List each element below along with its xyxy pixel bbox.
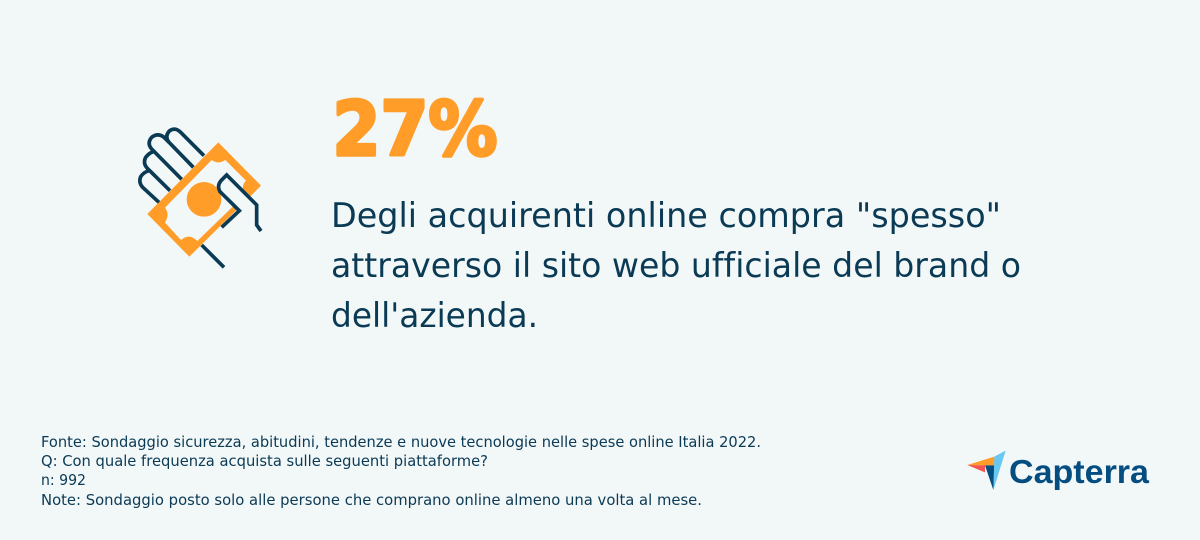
description text: Degli acquirenti online compra "spesso" <box>331 196 1001 236</box>
icon: hand holding banknote <box>140 129 261 267</box>
source notes: Note: Sondaggio posto solo alle persone che comprano online almeno una volta al mese. <box>41 491 702 509</box>
source notes: Q: Con quale frequenza acquista sulle seguenti piattaforme? <box>41 452 488 470</box>
logo wordmark: Capterra <box>1009 453 1150 490</box>
source notes: Fonte: Sondaggio sicurezza, abitudini, tendenze e nuove tecnologie nelle spese online Italia 2022. <box>41 433 761 451</box>
source notes <box>41 433 761 509</box>
source notes: n: 992 <box>41 471 86 489</box>
logo: Capterra <box>967 451 1150 490</box>
statistic: 27%: 27% <box>332 85 498 173</box>
logo mark <box>967 451 1006 490</box>
description text: dell'azienda. <box>331 296 538 336</box>
description text <box>331 196 1021 336</box>
description text: attraverso il sito web ufficiale del brand o <box>331 246 1021 286</box>
